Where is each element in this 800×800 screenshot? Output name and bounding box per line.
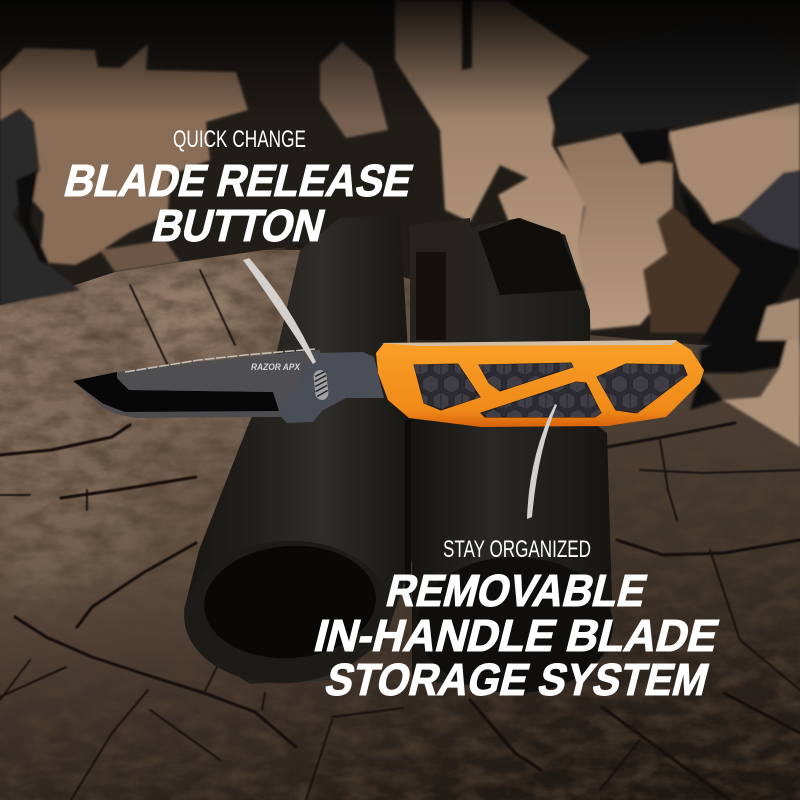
label: quick change: QUICK CHANGE bbox=[173, 126, 306, 153]
callout: blade release button bbox=[60, 126, 418, 364]
binoculars bbox=[179, 214, 613, 693]
knife bolster bbox=[279, 352, 384, 423]
heading: blade release: BLADE RELEASE bbox=[60, 156, 418, 206]
right barrel bbox=[412, 218, 612, 690]
handle grip panels bbox=[414, 363, 687, 417]
heading: in-handle blade: IN-HANDLE BLADE bbox=[310, 611, 724, 661]
right lens bbox=[417, 557, 613, 693]
knife blade bbox=[73, 349, 320, 423]
arrow: to release button bbox=[243, 258, 316, 364]
arrow: to handle storage bbox=[527, 404, 557, 519]
callout: storage system bbox=[310, 404, 724, 705]
left barrel bbox=[184, 214, 412, 684]
background: camouflage fabric bbox=[0, 0, 800, 447]
knife bbox=[73, 340, 704, 427]
heading: removable: REMOVABLE bbox=[382, 566, 652, 616]
heading: storage system: STORAGE SYSTEM bbox=[321, 655, 714, 705]
label: stay organized: STAY ORGANIZED bbox=[443, 536, 591, 563]
brand mark: RAZOR APX bbox=[251, 362, 301, 372]
release button bbox=[313, 369, 329, 401]
heading: button: BUTTON bbox=[148, 201, 330, 251]
binocular lens bbox=[179, 534, 393, 690]
orange handle bbox=[376, 340, 704, 427]
